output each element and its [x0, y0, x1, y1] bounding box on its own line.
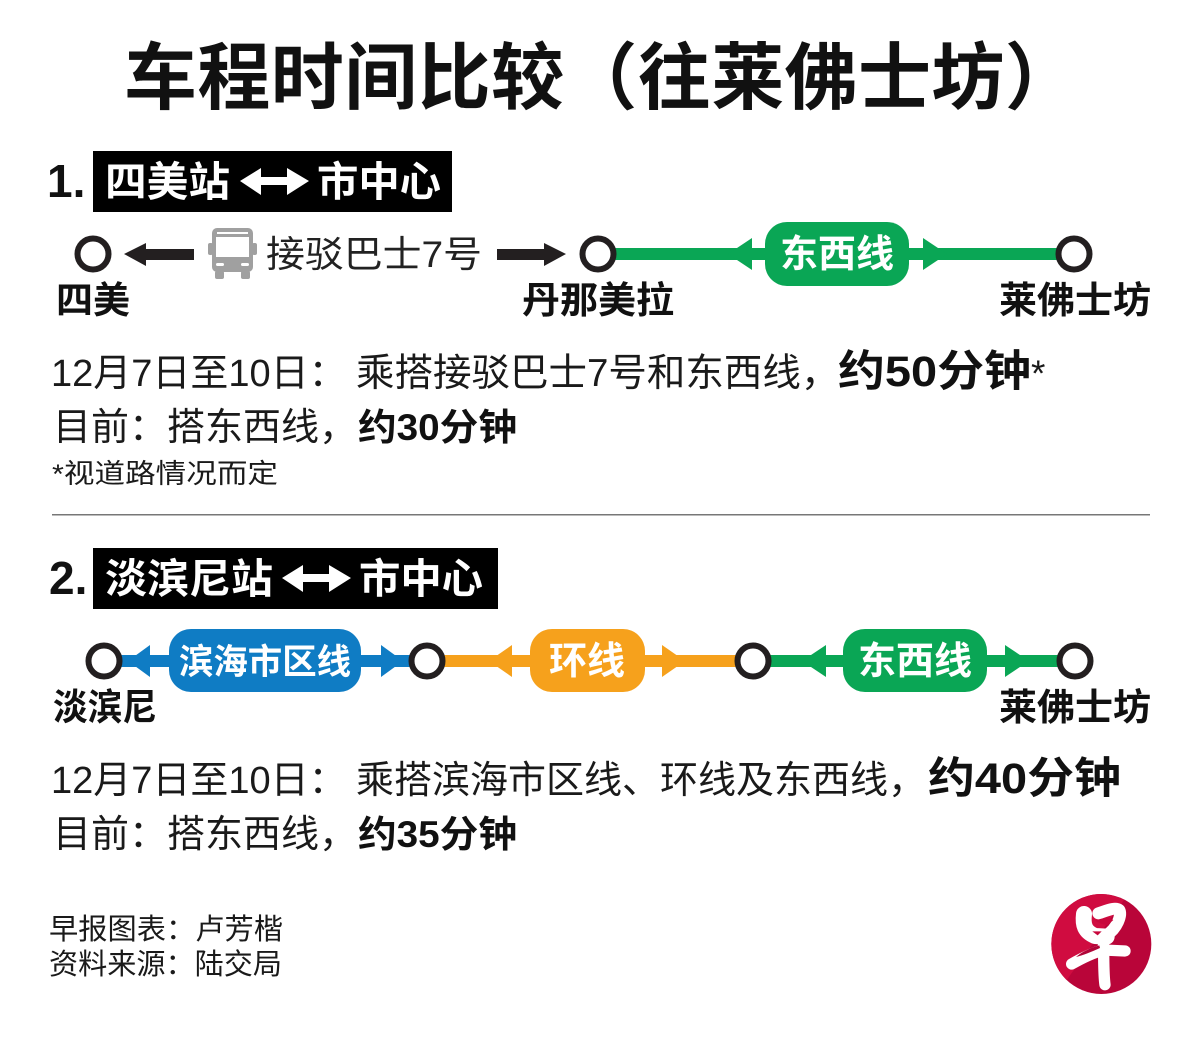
- badge: East-West Line: 东西线: [858, 641, 972, 683]
- travel time text 1: *视道路情况而定: [52, 459, 278, 489]
- station: Tanah Merah: 丹那美拉: [522, 280, 674, 321]
- logo: Zaobao: [1051, 894, 1151, 994]
- section 2 heading: 市中心: [359, 556, 483, 602]
- station: Raffles Place: [999, 646, 1151, 728]
- section 2: [49, 548, 1151, 856]
- station: Simei: [56, 238, 130, 321]
- badge: Downtown Line: [169, 629, 361, 692]
- shuttle bus label: 接驳巴士7号: [266, 234, 482, 275]
- travel time text 2: 12月7日至10日：: [51, 760, 347, 802]
- travel time text 1: 约50分钟: [838, 348, 1031, 396]
- travel time text 2: 目前：搭东西线，: [53, 814, 357, 856]
- section 1 heading: 四美站: [105, 159, 230, 205]
- badge: Circle Line: [530, 629, 645, 692]
- interchange station: [738, 646, 768, 676]
- badge: East-West Line: 东西线: [780, 234, 894, 276]
- section 1 heading: 市中心: [317, 159, 441, 205]
- travel time text 1: 12月7日至10日：: [51, 353, 347, 395]
- credits: 早报图表：卢芳楷: [49, 913, 283, 946]
- travel time text 2: 乘搭滨海市区线、环线及东西线，: [356, 760, 926, 802]
- orange line: [427, 655, 753, 667]
- divider: [52, 514, 1150, 516]
- section 2 heading: 2.: [49, 552, 87, 604]
- green line: [753, 655, 1075, 667]
- green arrowheads: [728, 238, 947, 270]
- station: Tampines: 淡滨尼: [53, 687, 157, 728]
- green line: [598, 248, 1074, 260]
- travel time text 1: 目前：搭东西线，: [53, 407, 357, 449]
- station: Raffles Place: 莱佛士坊: [999, 687, 1151, 728]
- station: Raffles Place: [999, 238, 1151, 321]
- station: Raffles Place: 莱佛士坊: [999, 280, 1151, 321]
- travel time text 1: 约30分钟: [358, 407, 517, 448]
- station: Simei: 四美: [56, 280, 130, 321]
- title: 车程时间比较（往莱佛士坊）: [124, 38, 1078, 119]
- badge: East-West Line: [765, 222, 909, 286]
- section 1 heading: 1.: [47, 155, 85, 207]
- credits: 资料来源：陆交局: [49, 948, 282, 981]
- route diagram 2: [53, 629, 1151, 728]
- badge: East-West Line: [843, 629, 987, 692]
- travel time text 1: *: [1031, 353, 1045, 394]
- route diagram 1: [56, 222, 1151, 321]
- section 1 heading: [47, 151, 452, 212]
- section 2 heading: [49, 548, 498, 609]
- travel time text 2: 约40分钟: [928, 755, 1121, 803]
- station: Tanah Merah: [522, 238, 674, 321]
- travel time text 1: 乘搭接驳巴士7号和东西线，: [356, 352, 839, 395]
- station: Tampines: [53, 646, 157, 728]
- arrow left: [124, 243, 194, 266]
- blue line: [104, 655, 427, 667]
- travel time text 2: [51, 755, 1121, 856]
- badge: Downtown Line: 滨海市区线: [179, 643, 351, 682]
- travel time text 1: [51, 348, 1045, 489]
- section 2 heading: 淡滨尼站: [105, 556, 273, 602]
- interchange station: [412, 646, 442, 676]
- badge: Circle Line: 环线: [549, 641, 625, 683]
- section 1: [47, 151, 1151, 489]
- icon: bus: [208, 228, 257, 279]
- credits: [49, 913, 283, 981]
- arrow right: [497, 243, 566, 266]
- travel time text 2: 约35分钟: [358, 814, 517, 855]
